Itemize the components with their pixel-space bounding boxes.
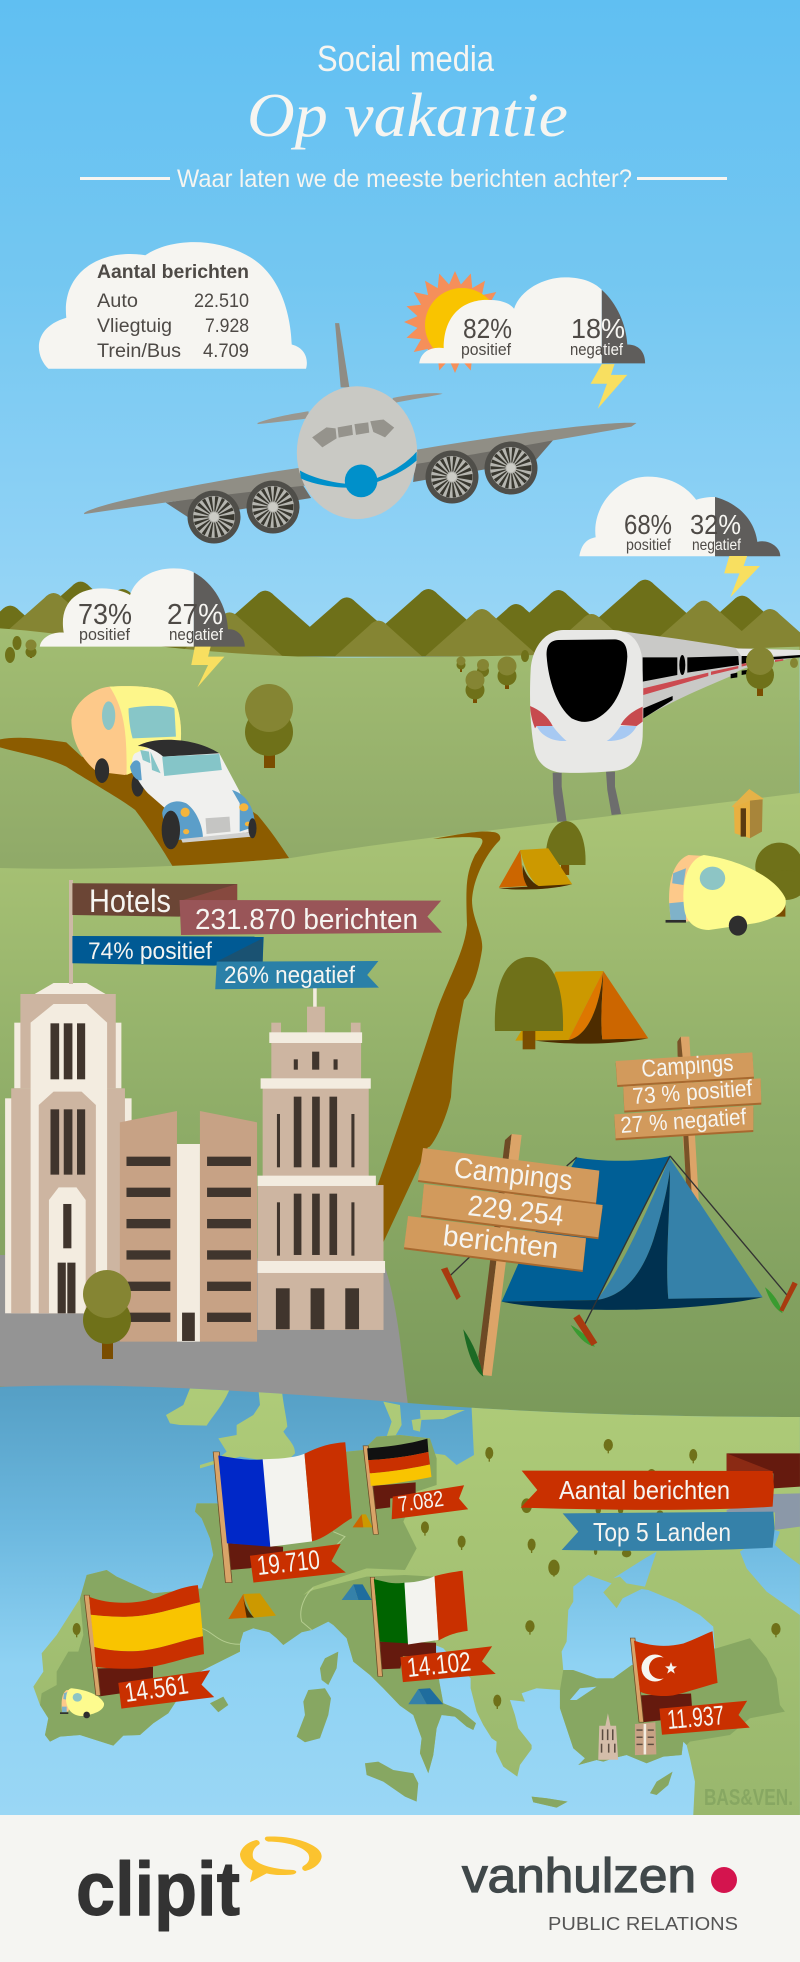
- highlighted countries: [40, 1435, 785, 1808]
- landscape trees: [5, 636, 529, 768]
- label: Germany 7.082: 7.082: [396, 1486, 445, 1517]
- rear sign post: [681, 1037, 699, 1210]
- sign: Campings 229.254 berichten: Campings: [452, 1152, 574, 1197]
- label: Hotels: Hotels: [89, 883, 171, 919]
- labels: country counts: [123, 1475, 731, 1735]
- sign boards: [404, 1052, 761, 1272]
- label: 27% negatief: 27%: [167, 599, 223, 631]
- table: message counts: [97, 262, 249, 362]
- building: right tower: [258, 988, 385, 1330]
- sky background: [0, 0, 800, 700]
- sign: Campings 229.254 berichten: [441, 1152, 574, 1265]
- label: Italy 14.102: 14.102: [405, 1646, 472, 1683]
- label: Top 5 Landen: Top 5 Landen: [593, 1517, 731, 1547]
- map trees: [73, 1439, 781, 1709]
- caravan: [71, 686, 181, 783]
- train: [530, 630, 800, 822]
- road: winding path: [375, 832, 500, 1260]
- label: 18% negatief: 18%: [571, 313, 625, 344]
- seas: [562, 1530, 800, 1700]
- label: Aantal berichten: Aantal berichten: [559, 1475, 730, 1505]
- car: [130, 740, 257, 849]
- label: 231.870 berichten: 231.870 berichten: [195, 904, 418, 936]
- sign: Campings sentiment: Campings: [641, 1050, 734, 1083]
- label: 26% negatief: 26% negatief: [224, 962, 355, 989]
- land: [33, 1375, 800, 1815]
- campsite with blue tent and signs: [404, 1037, 798, 1377]
- cloud: vliegtuig sentiment: [40, 568, 245, 687]
- borders: [202, 1532, 345, 1644]
- label: negatief: negatief: [570, 340, 623, 359]
- airplane: [84, 323, 636, 544]
- sign: Campings sentiment: [620, 1050, 754, 1138]
- train legs: [553, 772, 621, 822]
- flag: France: [213, 1442, 352, 1583]
- logo: vanhulzen: PUBLIC RELATIONS: [548, 1914, 738, 1934]
- logo: clipit: clipit: [76, 1847, 240, 1932]
- logo: vanhulzen: [462, 1850, 738, 1934]
- buildings: [5, 983, 385, 1342]
- map caravan: [60, 1688, 104, 1718]
- outhouse: [732, 789, 764, 838]
- mountains: [0, 580, 800, 657]
- near sign post: [463, 1134, 522, 1377]
- icon: sun: [404, 271, 506, 373]
- caravan with car: [71, 686, 257, 849]
- big tree and orange tent: [495, 957, 648, 1049]
- train carriages: [617, 631, 800, 718]
- small tree and orange tent: [499, 821, 586, 890]
- title block: [80, 38, 727, 193]
- heading: Social media: Social media: [317, 38, 495, 79]
- label: positief: positief: [79, 625, 130, 644]
- sign: Campings 229.254 berichten: berichten: [441, 1220, 560, 1265]
- hill: front: [0, 793, 800, 1420]
- table: message counts: 22.510: [194, 291, 249, 312]
- label: 82% positief: 82%: [463, 313, 512, 344]
- sign: Campings sentiment: 27 % negatief: [620, 1103, 748, 1138]
- logo: clipit: [76, 1836, 322, 1932]
- label: 73% positief: 73%: [78, 599, 132, 631]
- flag: Spain: [84, 1585, 214, 1709]
- road: left brown path: [0, 738, 289, 868]
- flag: Germany: [363, 1439, 468, 1534]
- label: 74% positief: 74% positief: [88, 938, 212, 965]
- label: negatief: negatief: [169, 625, 223, 644]
- label: Turkey 11.937: 11.937: [666, 1700, 725, 1735]
- engine wheels: [188, 442, 538, 544]
- fuselage: [297, 386, 417, 519]
- flag: Turkey: [630, 1631, 750, 1735]
- label: negatief: negatief: [692, 537, 741, 554]
- heading: Op vakantie: Op vakantie: [247, 82, 568, 150]
- train head: [530, 630, 643, 773]
- caravan: right: [666, 843, 800, 936]
- table: message counts: Aantal berichten: [97, 262, 249, 283]
- map buildings: [598, 1713, 656, 1760]
- table: message counts: Trein/Bus: [97, 341, 181, 362]
- footer: [0, 1815, 800, 1962]
- cloud: trein sentiment: [579, 477, 780, 597]
- subtitle: Waar laten we de meeste berichten achter?: [177, 165, 632, 193]
- label: 68% positief: 68%: [624, 509, 672, 540]
- label: positief: positief: [626, 537, 671, 554]
- banners: hotels: [69, 880, 442, 989]
- label: Spain 14.561: 14.561: [123, 1669, 190, 1708]
- ground: gray city square: [0, 1255, 408, 1405]
- sign: Campings 229.254 berichten: 229.254: [466, 1190, 565, 1233]
- logo: vanhulzen: vanhulzen: [462, 1850, 696, 1903]
- banner shapes: top 5 landen: [521, 1453, 800, 1551]
- tree in front of buildings: [83, 1270, 131, 1359]
- cloud: auto sentiment: [419, 277, 645, 409]
- map of Europe: [0, 1375, 800, 1820]
- building: middle block: [120, 1111, 257, 1342]
- label: France 19.710: 19.710: [255, 1545, 321, 1581]
- label: positief: positief: [461, 340, 511, 359]
- Turkish crescent and star: [642, 1654, 677, 1682]
- table: message counts: Auto: [97, 291, 138, 312]
- table: message counts: 4.709: [203, 341, 249, 362]
- sign: Campings sentiment: 73 % positief: [632, 1075, 754, 1109]
- map tents: [228, 1514, 443, 1704]
- table: message counts: Vliegtuig: [97, 316, 172, 337]
- tree beside train: [746, 647, 798, 696]
- flag: Italy: [370, 1571, 496, 1682]
- hill: back: [0, 628, 800, 873]
- tent: [441, 1156, 798, 1347]
- label: 32% negatief: 32%: [690, 509, 741, 540]
- building: left tower: [5, 983, 132, 1313]
- cloud: aantal berichten: [39, 242, 307, 369]
- table: message counts: 7.928: [205, 316, 249, 337]
